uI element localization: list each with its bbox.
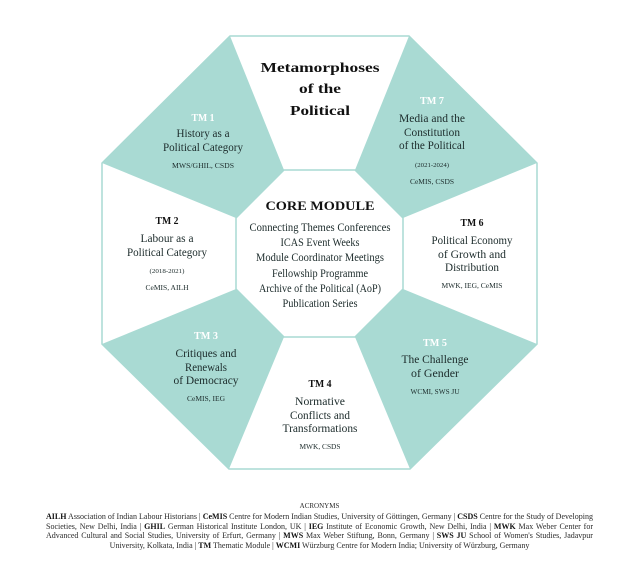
acronyms text block: Advanced Cultural and Social Studies, University of Erfurt, Germany | MWS Max Weber Stiftung, Bonn, Germany | SWS JU School of Women's Studies, Jadavpur [46,531,593,540]
panel: TM 5: of Gender [411,368,459,380]
panel: TM 4: Transformations [282,423,358,435]
panel: TM 2: Labour as a [140,233,194,245]
octagon outline [102,36,537,469]
panel: TM 1: TM 1 [192,113,214,124]
panel: TM 3: Renewals [185,362,227,374]
acronyms text block [46,502,593,550]
panel: TM 6: Political Economy [432,235,513,247]
panel: TM 1: Political Category [163,142,243,154]
panel: TM 4: MWK, CSDS [300,443,341,451]
panel: TM 3: CeMIS, IEG [187,395,225,403]
panel: TM 3: of Democracy [174,375,239,387]
panel: core module: Publication Series [282,298,358,310]
panel: core module: Module Coordinator Meetings [256,252,384,264]
panel: TM 6: Distribution [445,262,499,274]
title: of the [299,82,341,97]
panel: TM 7: TM 7 [420,96,444,107]
panel: TM 1: MWS/GHIL, CSDS [172,162,234,170]
panel: TM 4 [282,379,358,451]
title [260,61,380,119]
panel: TM 3: TM 3 [194,331,218,342]
panel: core module [250,198,391,310]
panel: TM 7: of the Political [399,140,465,152]
panel: TM 2: Political Category [127,247,207,259]
panel: TM 4: TM 4 [308,379,332,390]
panel: TM 6: MWK, IEG, CeMIS [442,282,503,290]
panel: core module: Fellowship Programme [272,268,368,280]
panel: TM 6: of Growth and [438,249,506,261]
panel: TM 2 [127,216,207,292]
panel: TM 4: Normative [295,396,345,408]
panel: TM 1 [102,36,284,218]
panel: core module: ICAS Event Weeks [280,237,360,249]
title: Metamorphoses [260,61,380,76]
panel: core module: CORE MODULE [266,198,374,213]
panel: TM 5: TM 5 [423,338,447,349]
panel: TM 7: CeMIS, CSDS [410,178,454,186]
panel: TM 6: TM 6 [460,218,484,229]
panel: core module: Archive of the Political (AoP) [259,283,381,295]
acronyms text block: AILH Association of Indian Labour Historians | CeMIS Centre for Modern Indian Studies, University of Göttingen, Germany | CSDS Centre for the Study of Developing [46,512,593,521]
inner octagon outline [236,170,403,337]
panel: TM 1: History as a [176,128,230,140]
panel: TM 7 [355,36,537,218]
acronyms text block: University, Kolkata, India | TM Thematic Module | WCMI Würzburg Centre for Modern India; University of Würzburg, Germany [110,541,529,550]
panel: TM 2: (2018-2021) [150,268,184,275]
panel: TM 5: WCMI, SWS JU [410,388,460,396]
panel: TM 7: Constitution [404,127,460,139]
panel: TM 5 [355,289,537,469]
panel: TM 7: (2021-2024) [415,162,449,169]
panel: TM 5: The Challenge [402,354,468,366]
acronyms text block: Societies, New Delhi, India | GHIL German Historical Institute London, UK | IEG Institute of Economic Growth, New Delhi, India | MWK Max Weber Center for [46,522,593,531]
panel: TM 7: Media and the [399,113,465,125]
panel: TM 2: TM 2 [156,216,178,227]
panel: TM 2: CeMIS, AILH [146,284,188,292]
panel: TM 4: Conflicts and [290,410,350,422]
acronyms text block: ACRONYMS [300,502,339,510]
panel: TM 3: Critiques and [176,348,237,360]
panel: core module: Connecting Themes Conferences [250,222,391,234]
panel: TM 3 [102,289,284,469]
panel: TM 6 [432,218,513,290]
title: Political [290,104,350,119]
